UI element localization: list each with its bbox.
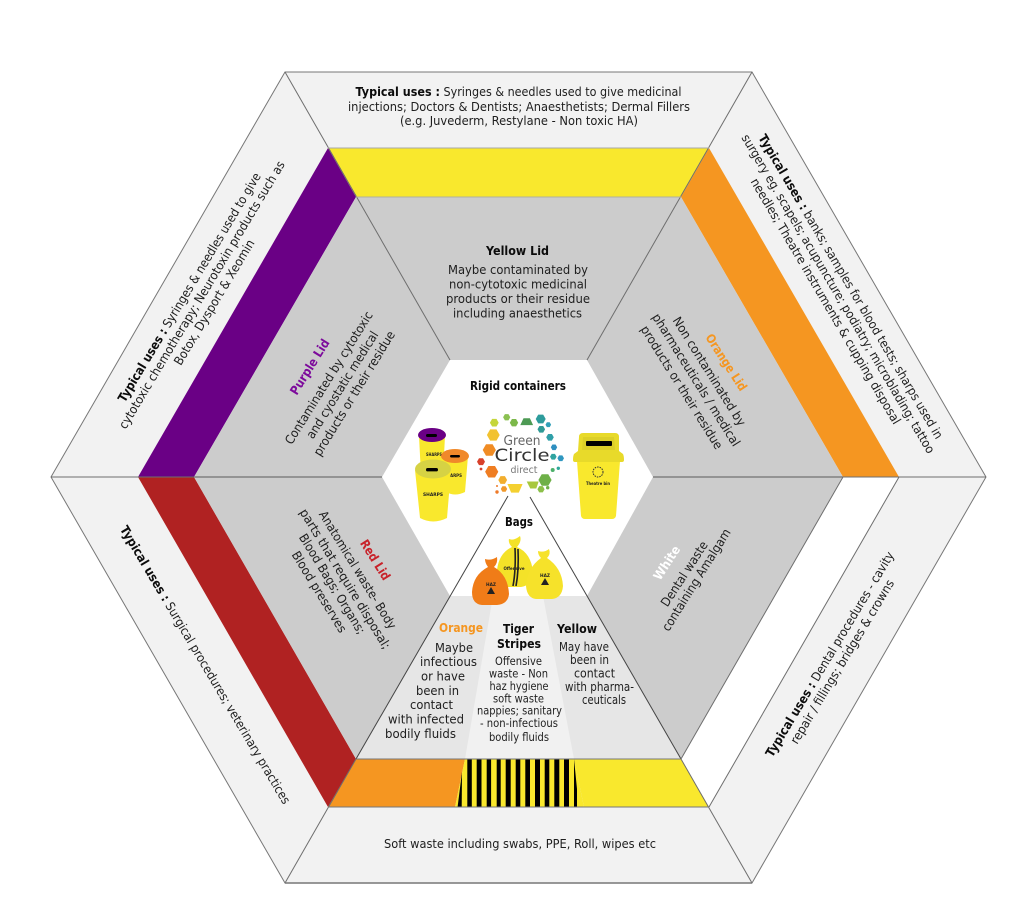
band: bag orange colour (328, 759, 465, 807)
icon: waste bags (472, 536, 563, 605)
bag column: tiger stripes text: haz hygiene (490, 679, 548, 693)
bag column: tiger stripes text: Tiger (503, 621, 535, 636)
bag column: yellow text: with pharma- (565, 680, 634, 694)
wedge: red lid text: Anatomical waste- Body (316, 508, 400, 632)
wedge: yellow lid text: products or their residue (446, 291, 590, 306)
bag column: yellow text: May have (559, 640, 609, 654)
bags triangle lower panel (356, 596, 681, 759)
inner hexagon: grey category wedges (194, 197, 843, 759)
bag column: orange text: or have (421, 668, 465, 684)
band: purple lid colour (138, 148, 356, 477)
bottom-right panel text: typical uses: Typical uses : Dental procedures - cavity (762, 548, 897, 760)
wedge: yellow lid text: Yellow Lid (485, 243, 549, 258)
bag column: yellow text: ceuticals (582, 693, 626, 707)
wedge: orange lid text: Non contaminated by (670, 314, 749, 429)
wedge: purple lid text: Purple Lid (287, 336, 333, 397)
icon: orange lid sharps bin: ARPS (450, 473, 462, 478)
logo wordmark: direct (510, 465, 538, 476)
bag column: yellow text: been in (570, 653, 609, 667)
wedge: red lid text: parts that require disposal; (297, 506, 394, 652)
logo wordmark: Circle (494, 446, 550, 466)
top-right panel text: typical uses: needles; Theatre instruments & cupping disposal (748, 175, 904, 427)
wedge: yellow lid text: Maybe contaminated by (448, 262, 589, 277)
top-right panel text: typical uses: Typical uses : banks; samples for blood tests; sharps used in (755, 131, 946, 441)
logo wordmark: Green (504, 434, 540, 449)
wedge: orange lid text: Orange Lid (702, 331, 750, 394)
bag column: orange text: Maybe (435, 640, 473, 655)
heading: bags: Bags (505, 514, 533, 529)
icon: theatre bin (573, 433, 624, 519)
bag column: tiger stripes text: bodily fluids (489, 730, 549, 744)
centre white hexagon (382, 360, 653, 596)
top-left panel text: typical uses: Typical uses : Syringes & needles used to give (114, 170, 264, 405)
bag column: tiger stripes text: nappies; sanitary (477, 704, 562, 718)
icon: offensive tiger bag: Offensive (504, 566, 525, 571)
icon: sharps containers (415, 428, 469, 522)
band: yellow lid colour (328, 148, 709, 197)
top panel text: typical uses: injections; Doctors & Dentists; Anaesthetists; Dermal Fillers (348, 99, 690, 114)
logo hexagon ring (477, 414, 564, 494)
wedge: red lid text: Red Lid (357, 537, 394, 583)
wedge: purple lid text: and cyostatic medical (303, 328, 381, 441)
wedge: purple lid text: products or their residue (310, 328, 398, 459)
bag column: orange text (385, 620, 483, 741)
top-right panel text: typical uses: surgery eg. scapels; acupuncture; podiatry; microblading; tattoo (739, 131, 938, 456)
wedge: yellow lid text (446, 243, 590, 320)
bag column: tiger stripes text: waste - Non (489, 666, 548, 680)
bag column: tiger stripes text (477, 621, 562, 744)
icon: theatre bin: Theatre bin (586, 481, 610, 487)
wedge: white lid text: containing Amalgam (658, 526, 734, 634)
wedge: white lid text: Dental waste (657, 538, 711, 609)
bag column: tiger stripes text: Stripes (497, 636, 541, 651)
wedge: white lid text: White (650, 543, 683, 583)
top-left panel text: typical uses: cytotoxic chemotherapy; Neurotoxin products such as (115, 158, 288, 431)
wedge: red lid text: Blood Bags; Organs; (296, 531, 369, 637)
bag column: yellow text (556, 621, 634, 707)
band: orange lid colour (681, 148, 899, 477)
top panel text: typical uses: (e.g. Juvederm, Restylane - Non toxic HA) (400, 113, 638, 128)
wedge: orange lid text: products or their residue (638, 323, 726, 452)
wedge: red lid text: Blood preserves (289, 548, 350, 635)
band: red lid colour (138, 477, 356, 807)
bag column: tiger stripes text: - non-infectious (480, 716, 558, 730)
bottom-right panel text: typical uses: repair / fillings; bridges & crowns (787, 577, 897, 746)
band: bag yellow colour (574, 759, 709, 807)
bag column: orange text: been in (416, 683, 459, 698)
bag column: orange text: bodily fluids (385, 726, 456, 741)
logo wordmark (494, 434, 550, 476)
wedge: orange lid text: pharmaceuticals / medical (649, 310, 744, 449)
icon: yellow HAZ bag: HAZ (540, 573, 550, 578)
band: white lid colour (681, 477, 899, 807)
bag column: yellow text: Yellow (556, 621, 597, 636)
bag column: yellow text: contact (574, 666, 615, 680)
logo: Green Circle direct (477, 414, 564, 494)
top panel text: typical uses (348, 84, 690, 128)
icon: orange HAZ bag: HAZ (486, 582, 496, 587)
icon: purple lid sharps bin: SHARPS (426, 452, 442, 457)
top-left panel text: typical uses: Botox, Dysport & Xeomin (170, 237, 258, 368)
band: tiger stripes (455, 759, 584, 807)
bag column: tiger stripes text: soft waste (493, 692, 544, 706)
bag column: orange text: infectious (420, 654, 477, 669)
wedge: purple lid text: Contaminated by cytotoxic (281, 308, 376, 447)
wedge: yellow lid text: including anaesthetics (453, 306, 582, 320)
wedge: yellow lid text: non-cytotoxic medicinal (449, 276, 587, 292)
bag column: orange text: Orange (439, 620, 483, 635)
bag column: orange text: with infected (388, 712, 464, 726)
bottom-left panel text: typical uses: Typical uses : Surgical procedures; veterinary practices (117, 523, 294, 807)
icon: large yellow sharps bin: SHARPS (423, 492, 443, 498)
bag column: tiger stripes text: Offensive (495, 654, 542, 668)
bottom panel text: soft waste: Soft waste including swabs, PPE, Roll, wipes etc (384, 836, 656, 851)
heading: rigid containers: Rigid containers (470, 378, 566, 393)
top panel text: typical uses: Typical uses : Syringes & needles used to give medicinal (356, 84, 682, 99)
bag column: orange text: contact (410, 697, 453, 712)
